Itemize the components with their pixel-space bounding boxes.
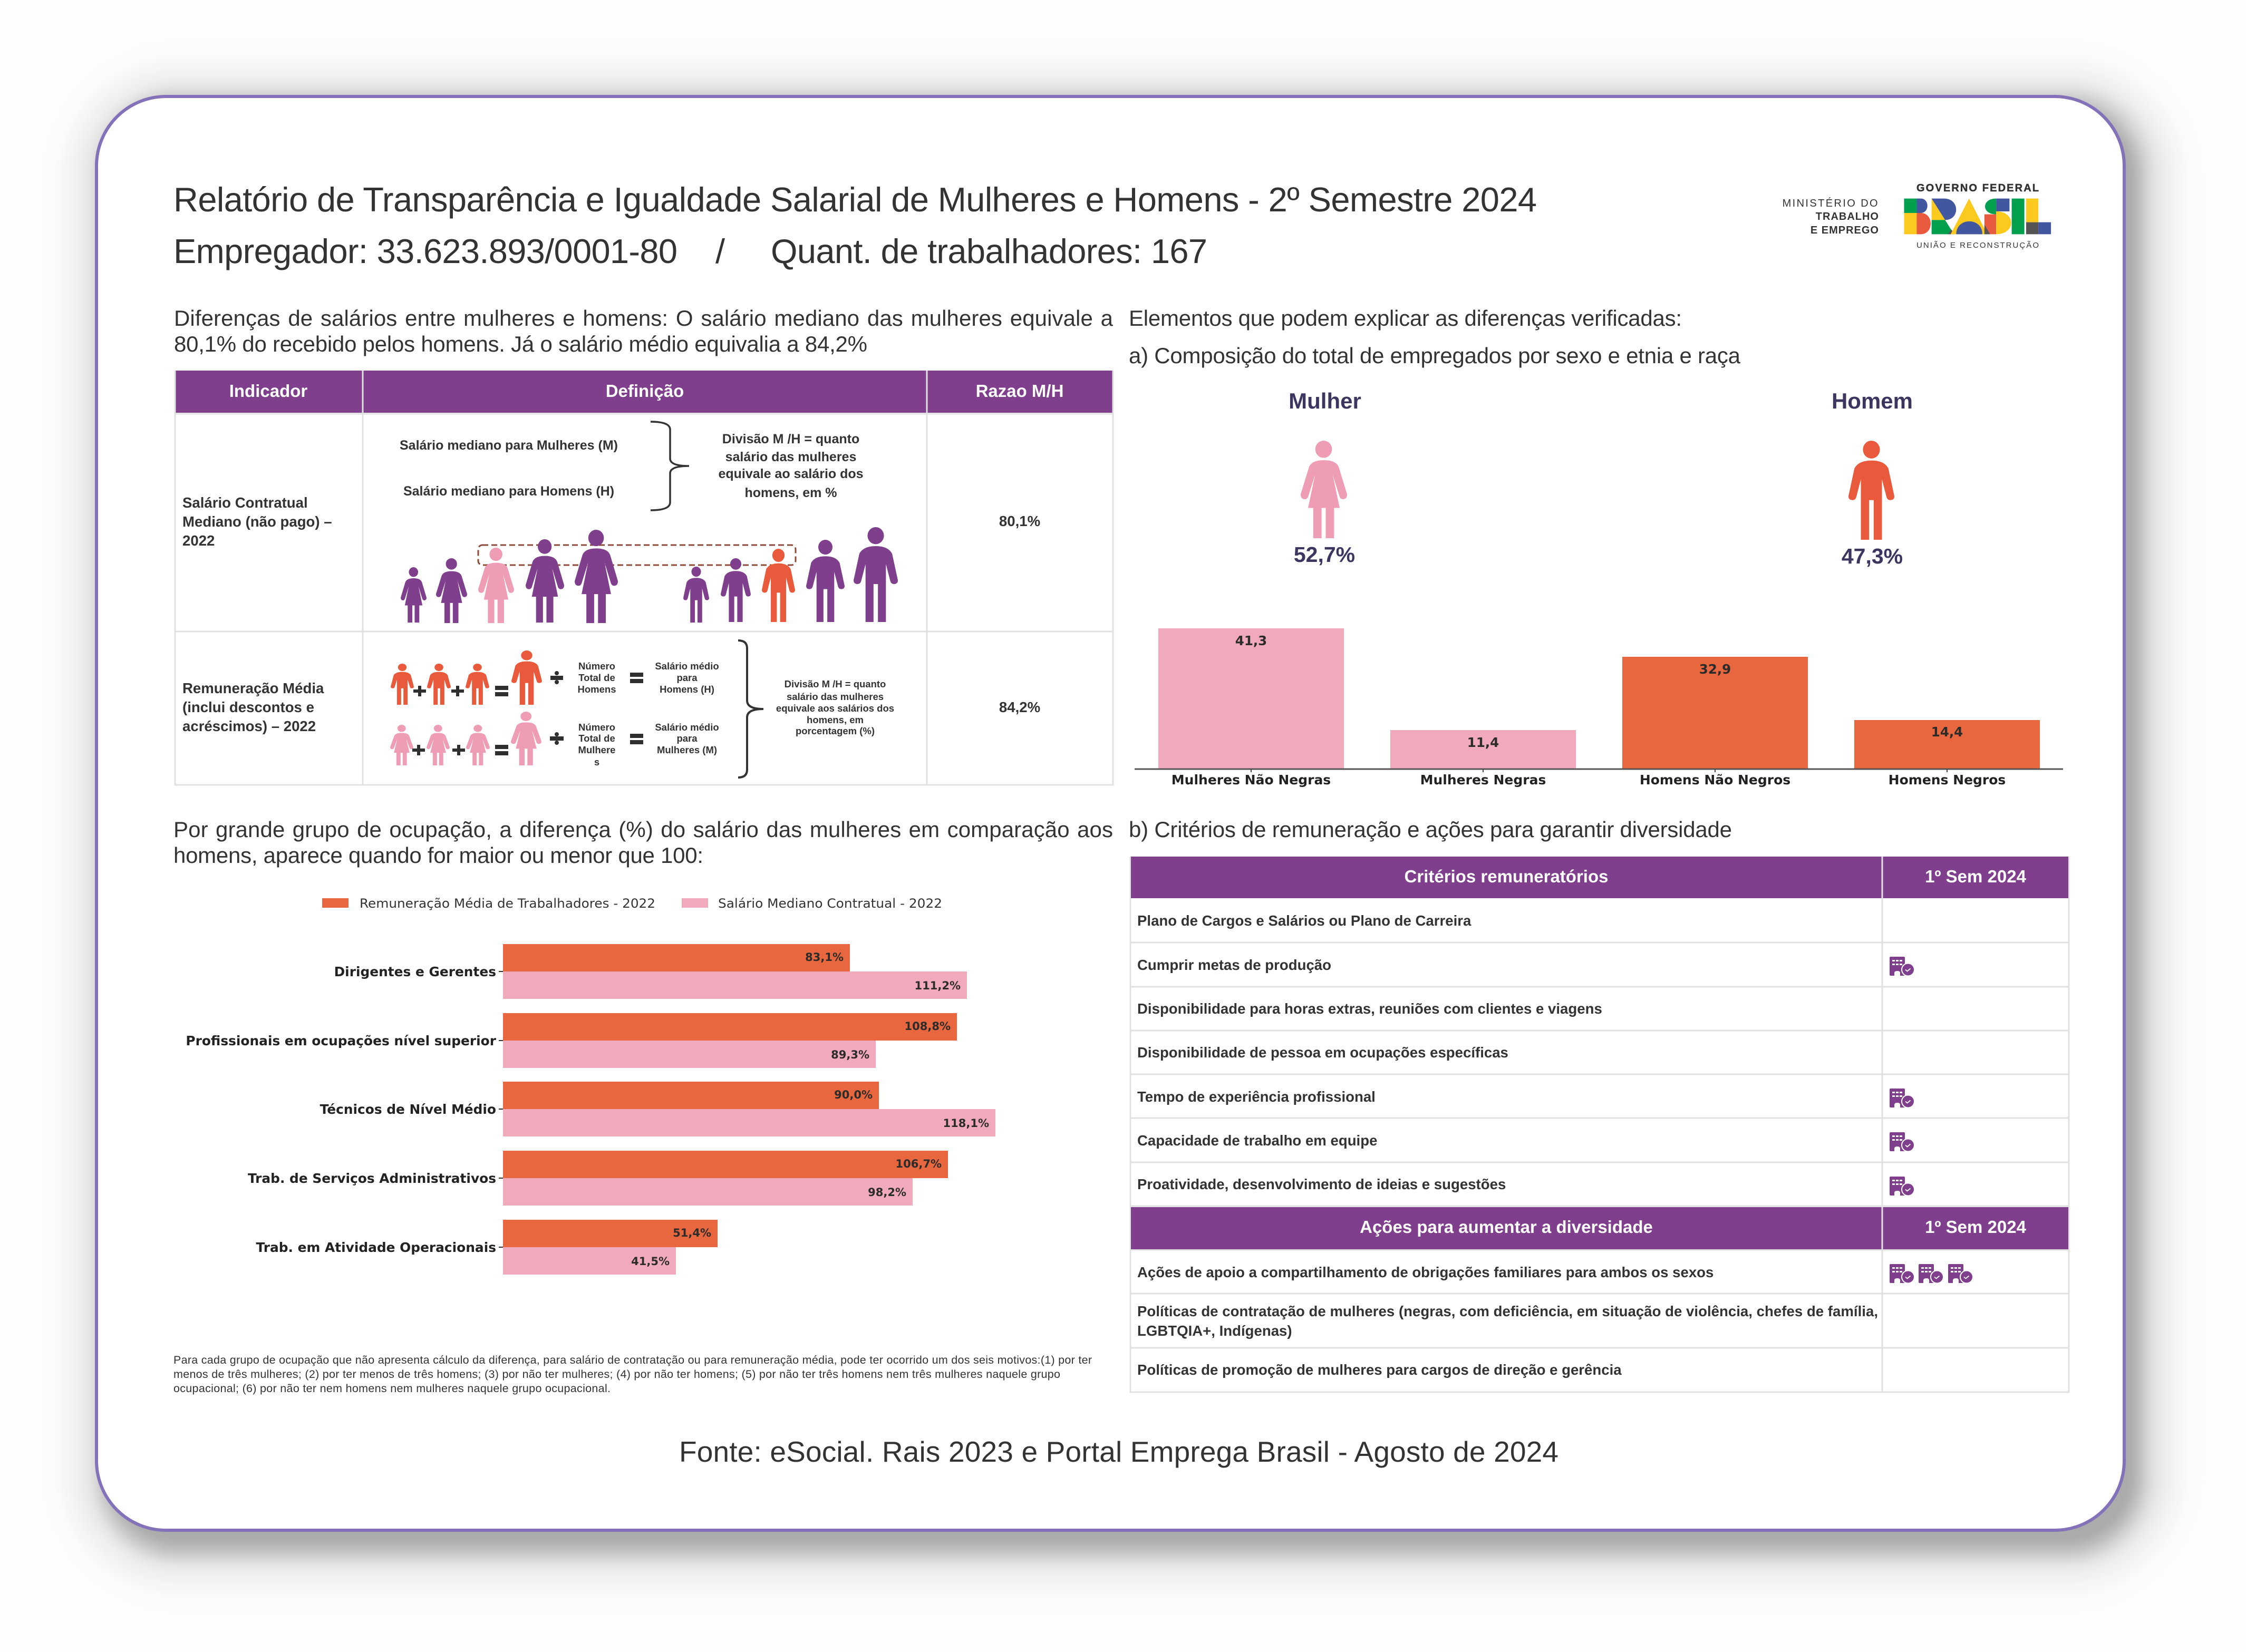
formula: women: Mulheres (M) (657, 744, 717, 755)
icons: criteria (1890, 957, 1914, 1196)
formula: men: Homens (578, 684, 616, 695)
criteria rows: Disponibilidade para horas extras, reuniões com clientes e viagens (1137, 1000, 1602, 1017)
median salary labels (400, 438, 618, 499)
row: Atividade Operacionais: 41,5% (631, 1255, 670, 1268)
header: ações (1131, 1207, 2068, 1249)
brace: average (738, 640, 763, 778)
action rows: Políticas de promoção de mulheres para cargos de direção e gerência (1137, 1362, 1622, 1378)
row: Técnicos: 90,0% (834, 1089, 873, 1101)
row: Profissionais: 108,8% (905, 1020, 951, 1033)
formula: women: Salário médio (655, 722, 719, 733)
row: Serviços Administrativos: 106,7% (896, 1158, 942, 1170)
footnote: menos de três mulheres; (2) por ter menos de três homens; (3) por não ter mulheres; (4) por não ter homens; (5) por não ter três homens nem três mulheres naquele grupo (173, 1368, 1060, 1381)
value 80,1%: 80,1% (999, 513, 1040, 529)
action rows: Políticas de contratação de mulheres (negras, com deficiência, em situação de violência, chefes de família, (1137, 1303, 1878, 1319)
logo: ministry and government: MINISTÉRIO DO (1783, 197, 1879, 209)
title (173, 180, 1537, 270)
figures: women (401, 530, 618, 623)
formula: women: para (676, 733, 698, 744)
header: critérios: Critérios remuneratórios (1405, 867, 1608, 886)
panel: mulher: Mulher (1289, 388, 1361, 413)
logo: ministry and government: UNIÃO E RECONSTRUÇÃO (1916, 241, 2039, 250)
row: Atividade Operacionais: Trab. em Atividade Operacionais (256, 1240, 496, 1255)
panel: mulher: 52,7% (1294, 542, 1355, 567)
row: salário contratual mediano label: Salário Contratual (182, 494, 308, 511)
bar chart: composition: Homens Não Negros (1640, 772, 1790, 788)
heading: composition: a) Composição do total de empregados por sexo e etnia e raça (1129, 343, 1741, 368)
average definition text: porcentagem (%) (796, 725, 875, 736)
white card panel (96, 96, 2124, 1530)
logo: ministry and government: TRABALHO (1816, 211, 1879, 222)
row: Serviços Administrativos: 98,2% (868, 1186, 906, 1199)
header: ações: 1º Sem 2024 (1925, 1217, 2027, 1237)
median definition text (718, 432, 864, 500)
figures: men (683, 527, 898, 623)
criteria rows: Tempo de experiência profissional (1137, 1089, 1376, 1105)
criteria rows: Plano de Cargos e Salários ou Plano de Carreira (1137, 912, 1471, 929)
average definition text: Divisão M /H = quanto (785, 678, 886, 689)
criteria rows: Capacidade de trabalho em equipe (1137, 1132, 1377, 1149)
bar chart: composition: 32,9 (1699, 662, 1731, 677)
formula: women: s (594, 756, 599, 767)
criteria rows (1137, 912, 1602, 1192)
bar chart: composition: Homens Negros (1889, 772, 2006, 788)
row: salário contratual mediano label: Mediano (não pago) – (182, 513, 332, 530)
criteria rows: Disponibilidade de pessoa em ocupações específicas (1137, 1044, 1508, 1061)
row: salário contratual mediano label (182, 494, 332, 549)
average definition text: equivale aos salários dos (776, 703, 894, 714)
median definition text: salário das mulheres (725, 450, 856, 464)
formula: women: Total de (578, 733, 615, 744)
bar chart: composition: 14,4 (1931, 724, 1963, 740)
average definition text (776, 678, 894, 736)
panel: homem: 47,3% (1842, 544, 1903, 568)
title: Empregador: 33.623.893/0001-80 (173, 232, 677, 270)
row: Atividade Operacionais (256, 1220, 718, 1275)
table header (175, 371, 1113, 413)
row: Profissionais: 89,3% (831, 1048, 869, 1061)
row: Técnicos: 118,1% (943, 1117, 989, 1130)
footnote: Para cada grupo de ocupação que não apresenta cálculo da diferença, para salário de contratação ou para remuneração média, pode ter ocorrido um dos seis motivos:(1) por ter (173, 1354, 1092, 1366)
table header: Definição (606, 381, 684, 401)
action rows: LGBTQIA+, Indígenas) (1137, 1323, 1292, 1339)
legend: occupation chart: Salário Mediano Contratual - 2022 (718, 896, 942, 911)
panel: mulher (1289, 388, 1361, 567)
row: Atividade Operacionais: 51,4% (673, 1227, 711, 1239)
intro paragraph: salary differences: Diferenças de salários entre mulheres e homens: O salário mediano das mulheres equivale a (174, 306, 1114, 331)
footnote: ocupacional; (6) por não ter nem homens nem mulheres naquele grupo ocupacional. (173, 1382, 611, 1395)
legend: occupation chart (322, 896, 942, 911)
row: Serviços Administrativos (248, 1151, 948, 1206)
header: ações: Ações para aumentar a diversidade (1360, 1217, 1653, 1237)
row: remuneração média label: Remuneração Média (182, 680, 324, 696)
logo: ministry and government (1783, 182, 2051, 250)
formula: men: para (676, 672, 698, 683)
bar chart: composition: 41,3 (1235, 633, 1267, 648)
formula: men (391, 650, 719, 705)
row: Dirigentes e Gerentes: Dirigentes e Gerentes (334, 964, 496, 979)
panel: homem: Homem (1832, 388, 1913, 413)
average definition text: homens, em (807, 714, 864, 725)
median definition text: equivale ao salário dos (718, 467, 864, 481)
median definition text: homens, em % (744, 485, 837, 500)
header: critérios: 1º Sem 2024 (1925, 867, 2027, 886)
row: Dirigentes e Gerentes: 111,2% (915, 979, 961, 992)
icons: actions (1890, 1264, 1973, 1283)
source: Fonte: eSocial. Rais 2023 e Portal Emprega Brasil - Agosto de 2024 (679, 1435, 1558, 1468)
row: Dirigentes e Gerentes: 83,1% (805, 951, 844, 964)
row: salário contratual mediano label: 2022 (182, 532, 215, 549)
row: Técnicos: Técnicos de Nível Médio (320, 1102, 496, 1117)
median salary labels: Salário mediano para Mulheres (M) (400, 438, 618, 453)
row: Profissionais: Profissionais em ocupações nível superior (186, 1033, 497, 1048)
row: Dirigentes e Gerentes (334, 944, 967, 999)
table header: Indicador (229, 381, 307, 401)
intro paragraph: salary differences (174, 306, 1114, 356)
table header: Razao M/H (976, 381, 1063, 401)
action rows: Ações de apoio a compartilhamento de obrigações familiares para ambos os sexos (1137, 1264, 1713, 1280)
row: remuneração média label: acréscimos) – 2022 (182, 718, 316, 734)
paragraph: occupation groups: Por grande grupo de ocupação, a diferença (%) do salário das mulheres em comparação aos (173, 817, 1113, 842)
formula: women: Mulhere (578, 744, 615, 755)
bar chart: composition: 11,4 (1467, 735, 1499, 750)
row: Serviços Administrativos: Trab. de Serviços Administrativos (248, 1171, 496, 1186)
title: / (715, 232, 725, 270)
heading: explanatory elements: Elementos que podem explicar as diferenças verificadas: (1129, 306, 1682, 331)
title: Quant. de trabalhadores: 167 (771, 232, 1207, 270)
legend: occupation chart: Remuneração Média de Trabalhadores - 2022 (360, 896, 655, 911)
average definition text: salário das mulheres (787, 691, 884, 702)
logo: ministry and government: E EMPREGO (1811, 225, 1879, 236)
table: criteria and actions (1130, 857, 2069, 1392)
formula: women (390, 712, 719, 767)
paragraph: occupation groups (173, 817, 1113, 868)
criteria rows: Proatividade, desenvolvimento de ideias e sugestões (1137, 1176, 1506, 1192)
row: remuneração média label: (inclui descontos e (182, 699, 314, 715)
median highlight dashed box (478, 545, 796, 565)
panel: homem (1832, 388, 1913, 568)
formula: men: Salário médio (655, 660, 719, 672)
formula: men: Total de (578, 672, 615, 683)
intro paragraph: salary differences: 80,1% do recebido pelos homens. Já o salário médio equivalia a 84,2% (174, 332, 867, 356)
action rows (1137, 1264, 1878, 1378)
brace (651, 422, 689, 510)
formula: men: Número (578, 660, 615, 672)
bar chart: occupation groups (186, 944, 995, 1275)
table: indicators (175, 371, 1113, 785)
median definition text: Divisão M /H = quanto (722, 432, 859, 446)
formula: women: Número (578, 722, 615, 733)
footnote (173, 1354, 1092, 1395)
row: remuneração média label (182, 680, 324, 734)
bar chart: composition: Mulheres Negras (1420, 772, 1546, 788)
criteria rows: Cumprir metas de produção (1137, 957, 1331, 973)
heading: criteria: b) Critérios de remuneração e ações para garantir diversidade (1129, 817, 1732, 842)
paragraph: occupation groups: homens, aparece quando for maior ou menor que 100: (173, 843, 703, 868)
median salary labels: Salário mediano para Homens (H) (403, 484, 614, 499)
logo: ministry and government: GOVERNO FEDERAL (1916, 182, 2039, 194)
formula: men: Homens (H) (660, 684, 714, 695)
bar chart: composition: Mulheres Não Negras (1172, 772, 1331, 788)
value 84,2%: 84,2% (999, 699, 1040, 715)
title: Relatório de Transparência e Igualdade Salarial de Mulheres e Homens - 2º Semestre 2024 (173, 180, 1537, 219)
row: Profissionais (186, 1013, 957, 1068)
header: critérios (1131, 857, 2068, 898)
bar chart: composition (1135, 628, 2063, 788)
row: Técnicos (320, 1082, 995, 1136)
